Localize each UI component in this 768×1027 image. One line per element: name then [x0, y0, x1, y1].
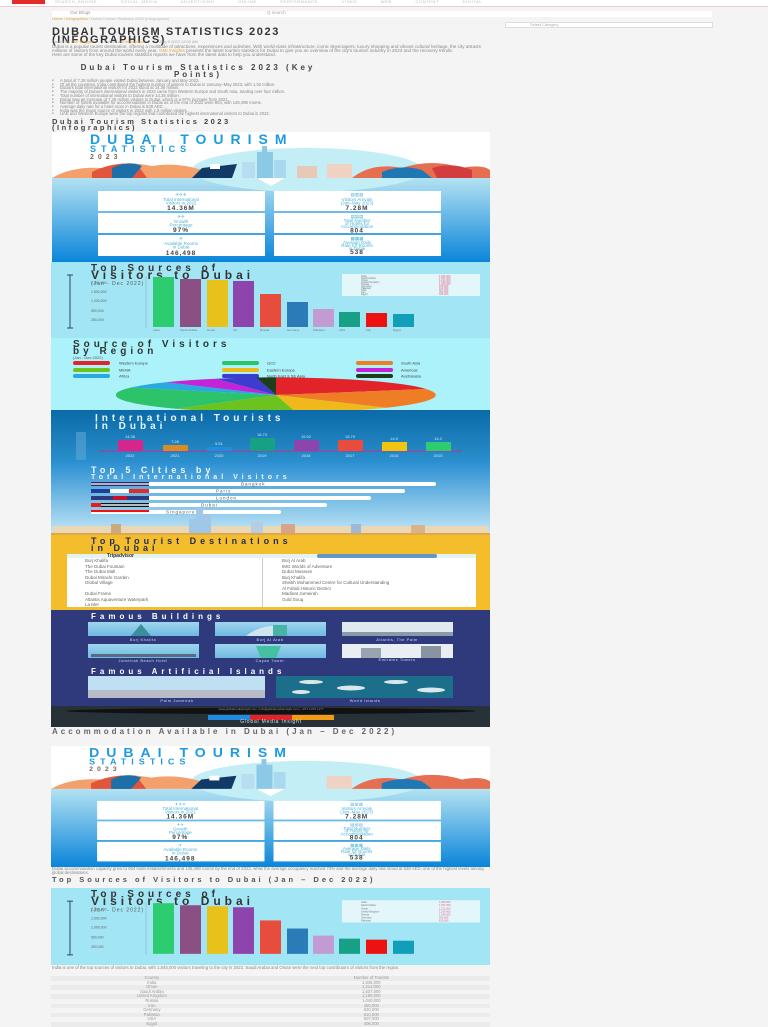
key points list: Total number of international visitors to Dubai were 14.36 million. — [60, 93, 180, 98]
chart: international tourists: 2021 — [171, 453, 180, 458]
chart: top sources of visitors: 1,845,000 — [439, 274, 451, 278]
visitors table: Saudi Arabia — [140, 989, 164, 994]
infographic repeat: hero + stat cards: Total International — [163, 806, 198, 811]
building tiles: Palm Jumeirah — [160, 698, 194, 703]
chart repeat: top sources of visitors: 1,637,000 — [439, 903, 451, 907]
visitors table: 1,637,000 — [362, 989, 381, 994]
chart: international tourists: 2018 — [302, 453, 311, 458]
chart: top sources of visitors: Saudi Arabia — [180, 328, 197, 332]
accommodation text: Dubai accommodation capacity grew to 804 hotel establishments and 146,498 rooms by the end of 2022, while the average occupancy reached 73% and the average daily rate stood at 538 AED, one of the highest levels among global destinations. — [52, 866, 484, 875]
intro paragraph: Dubai is a popular tourist destination, offering a multitude of attractions, experiences and activities. With world-class infrastructure, iconic skyscrapers, luxury shopping and vibrant cultural heritage, the city attracts millions of visitors from around the world every year. GMI Insights presents the latest tourism statistics for Dubai to give you an overview of the city's tourism industry in 2023 and the recovery trends. — [52, 44, 481, 53]
key points list: UAE and Western Europe were the top regions that contributed the highest international visitors to Dubai in 2022. — [60, 111, 270, 116]
footer: global media insight: www.globalmediainsight.com | info@globalmediainsight.com | +971 4 876 1177 — [218, 707, 324, 711]
visitors text: India is one of the top sources of visitors to Dubai, with 1,845,000 visitors traveling to the city in 2022. Saudi Arabia and Oman were the next top contributors of visitors from the region. — [52, 965, 400, 970]
infographic repeat: hero + stat cards: 538 — [350, 855, 364, 861]
infographic repeat: hero + stat cards: Growth — [173, 827, 188, 832]
top 5 cities: Total International Visitors — [91, 474, 291, 481]
key points list: Of all the countries, India contributed the highest number of visitors to Dubai in January–May 2023, with 1.02 million. — [60, 82, 275, 87]
destinations table: Sheikh Mohammed Centre for Cultural Understanding — [282, 580, 389, 585]
visitors table: Oman — [146, 984, 158, 989]
destinations table: Madinat Jumeirah — [282, 591, 318, 596]
infographic repeat: hero + stat cards: Accommodation — [341, 832, 373, 836]
visitors table: 620,000 — [364, 1007, 379, 1012]
chart repeat: top sources of visitors: Oman — [361, 906, 369, 910]
infographic 1: hero + stat cards: in Dubai — [349, 246, 365, 251]
destinations table: Burj Khalifa — [85, 558, 108, 563]
infographic 1: hero + stat cards: 538 — [350, 249, 364, 256]
infographic repeat: hero + stat cards: 97% — [172, 834, 188, 841]
key points list: Dubai saw an increase of 7.28 million visitors to Dubai, which is a 97% increase from 2021. — [60, 97, 229, 102]
pie: source of visitors by region: Australasia — [401, 374, 422, 378]
chart repeat: top sources of visitors: 1,000,000 — [91, 926, 107, 930]
chart repeat: top sources of visitors: 250,000 — [91, 945, 104, 949]
chart repeat: top sources of visitors: 1,212,000 — [439, 906, 451, 910]
top 5 cities: Top 5 Cities by — [91, 465, 214, 475]
infographic repeat: hero + stat cards: ✈ — [178, 843, 183, 847]
chart: top sources of visitors: 1,040,000 — [439, 282, 451, 286]
pie: source of visitors by region: North East & SE Asia — [267, 374, 306, 378]
infographic repeat: hero + stat cards: Percentage — [169, 830, 192, 835]
destinations table: Dubai Museum — [282, 569, 312, 574]
chart repeat: top sources of visitors: Visitors to Dubai — [91, 894, 254, 908]
infographic repeat: hero + stat cards: Visitors in 2022 — [165, 810, 196, 814]
chart: top sources of visitors: Top Sources of — [91, 263, 219, 274]
chart: top sources of visitors: 450,000 — [439, 290, 449, 294]
chart: international tourists: 15.92 — [301, 434, 312, 439]
pie: source of visitors by region: South Asia — [401, 360, 421, 366]
chart repeat: top sources of visitors: 610,000 — [439, 918, 449, 922]
infographic 1: hero + stat cards: ▦▦▦ — [351, 236, 364, 241]
chart: top sources of visitors — [51, 262, 490, 338]
infographic repeat: hero + stat cards: in Dubai — [348, 852, 365, 857]
chart: international tourists: 7.28 — [171, 439, 180, 444]
chart: top sources of visitors: Iran — [361, 290, 366, 294]
top 5 cities: London — [216, 496, 237, 500]
infographic 1: hero + stat cards: ✈✈✈ — [175, 192, 187, 197]
sidebar select — [505, 22, 713, 28]
infographic repeat: hero + stat cards: 146,498 — [165, 856, 196, 862]
destinations table: Dubai Frame — [85, 591, 111, 596]
chart: top sources of visitors: Russia — [260, 328, 270, 332]
infographic 1: hero + stat cards: 14.36M — [167, 205, 195, 212]
building tiles: Atlantis, The Palm — [376, 637, 418, 642]
key points list: A total of 7.28 million people visited Dubai between January and May 2023. — [60, 78, 199, 83]
chart: top sources of visitors: Russia — [361, 282, 369, 286]
infographic repeat: hero + stat cards: Visitors Arrivals — [341, 806, 373, 811]
destinations title — [91, 536, 292, 553]
visitors table: 450,000 — [364, 1003, 379, 1008]
visitors table: Russia — [145, 998, 158, 1003]
chart: top sources of visitors: Visitors to Dubai — [91, 268, 254, 282]
breadcrumb: Home / Infographics / Dubai Tourism Statistics 2023 (Infographics) — [52, 16, 169, 21]
chart: international tourists: 2020 — [215, 453, 224, 458]
destinations table: Tripadvisor — [107, 553, 134, 559]
building tiles: Burj Khalifa — [130, 637, 156, 642]
chart: top sources of visitors: 620,000 — [439, 284, 449, 288]
infographic repeat: hero + stat cards: STATISTICS — [89, 757, 190, 767]
chart: top sources of visitors: Germany — [287, 328, 300, 332]
key points list — [52, 78, 285, 116]
key points list: India was the major source of visitors in 2022 with 1.8 million visitors. — [60, 108, 188, 113]
pie: source of visitors by region: Americas — [401, 368, 418, 372]
chart: international tourists: International Tourists — [95, 413, 284, 424]
chart: top sources of visitors: (Jan - Dec 2022) — [91, 281, 144, 287]
visitors table: Country — [144, 975, 159, 980]
infographic 1: hero + stat cards: 97% — [173, 227, 189, 234]
chart: top sources of visitors: 250,000 — [91, 318, 104, 322]
intro paragraph — [52, 44, 481, 57]
chart: international tourists: 16.73 — [257, 432, 268, 437]
infographic 1: hero + stat cards: of Hotels for — [345, 221, 370, 226]
chart repeat: top sources of visitors: United Kingdom — [361, 909, 379, 913]
chart: international tourists: 2015 — [434, 453, 443, 458]
visitors table: 406,000 — [364, 1021, 379, 1026]
destinations table: Atlantis Aquaventure Waterpark — [85, 596, 148, 602]
logo — [208, 715, 334, 720]
infographic 1: hero + stat cards: Accommodation — [341, 224, 374, 229]
chart: top sources of visitors: 2,000,000 — [91, 281, 107, 285]
chart repeat: top sources of visitors: 500,000 — [91, 936, 104, 940]
chart: top sources of visitors: Saudi Arabia — [361, 276, 376, 280]
top sources heading: Top Sources of Visitors to Dubai (Jan – Dec 2022) — [52, 875, 375, 884]
key points list: Dubai's total international visitors for 2022 stood at 14.36 million. — [60, 85, 180, 90]
chart: international tourists: 14.2 — [434, 436, 443, 441]
visitors table — [51, 975, 490, 1027]
chart: top sources of visitors: Pakistan — [313, 328, 325, 332]
pie: source of visitors by region: MENA — [119, 368, 131, 372]
intro paragraph: Here are some of the key Dubai tourism statistics reports we have from the latest data to help you understand. — [52, 52, 276, 57]
infographic 1: hero + stat cards: Available Rooms — [164, 241, 199, 246]
infographic repeat: hero + stat cards: Total Number — [343, 826, 371, 831]
pie: source of visitors by region: Africa — [119, 374, 130, 378]
chart: top sources of visitors: India — [153, 328, 160, 332]
chart: top sources of visitors: USA — [339, 328, 345, 332]
key points list: Average daily rate for a hotel room in Dubai is 538 AED. — [60, 104, 164, 109]
chart: top sources of visitors: UK — [233, 328, 237, 332]
infographic repeat: hero + stat cards: (Jan–May 2023) — [340, 810, 374, 814]
chart: top sources of visitors: 500,000 — [91, 309, 104, 313]
visitors table: Iran — [148, 1003, 155, 1008]
top 5 cities: Paris — [216, 488, 231, 494]
chart: top sources of visitors: 1,180,000 — [439, 280, 451, 284]
infographic 1: hero + stat cards: in Dubai — [173, 244, 189, 250]
infographic 1: hero + stat cards — [52, 132, 490, 262]
destinations title: Top Tourist Destinations — [91, 536, 292, 546]
pie: source of visitors by region: Western Europe — [119, 360, 149, 366]
infographic repeat: hero + stat cards: of Hotels for — [345, 829, 369, 834]
infographic repeat: hero + stat cards: 7.28M — [345, 814, 368, 821]
key points list: Number of hotels available for accommodation in Dubai as of the end of 2022 were 804, with 146,498 rooms. — [60, 100, 262, 105]
pie: source of visitors by region — [51, 338, 490, 410]
infographic repeat: hero + stat cards: ▤▤▤ — [350, 822, 363, 827]
destinations title: in Dubai — [91, 543, 158, 553]
infographic 1: hero + stat cards: ▤▤▤ — [351, 214, 364, 219]
meta: Posted by GMI Blogger Posted in Infographics Aug 9 2023 12:00 AM — [52, 39, 198, 44]
building tiles: Cayan Tower — [256, 658, 285, 663]
visitors table: 1,040,000 — [362, 998, 381, 1003]
chart: top sources of visitors: Iran — [366, 328, 372, 332]
chart: international tourists: 15.79 — [345, 434, 356, 439]
infographic 1: hero + stat cards: Percentage — [169, 222, 193, 228]
building tiles: Famous Artificial Islands — [91, 667, 285, 676]
infographic 1: hero + stat cards: Rate for Rooms — [341, 243, 374, 248]
destinations table: Burj Al Arab — [282, 558, 306, 563]
chart: top sources of visitors: 610,000 — [439, 286, 449, 290]
key points heading: Dubai Tourism Statistics 2023 (Key Points) — [81, 63, 315, 78]
breadcrumb bar: Our Blogs — [70, 10, 90, 15]
visitors table: Germany — [143, 1007, 160, 1012]
footer: global media insight — [51, 706, 490, 727]
visitors table: 1,180,000 — [362, 993, 381, 998]
chart: top sources of visitors: United Kingdom — [361, 280, 379, 284]
infographic 1: hero + stat cards: Visitors Arrivals — [342, 197, 373, 202]
destinations table: Al Fahidi Historic District — [282, 586, 331, 590]
visitors table: USA — [148, 1016, 156, 1021]
destinations table: The Dubai Fountain — [85, 564, 125, 568]
infographic 1: hero + stat cards: Total International — [163, 197, 199, 202]
infographic 1: hero + stat cards: ✈ — [179, 236, 183, 241]
visitors table: Number of Tourists — [354, 975, 389, 980]
logo — [12, 0, 45, 4]
infographic 1: hero + stat cards: ▥▥▥ — [351, 192, 364, 197]
infographic 1: hero + stat cards: Average Daily — [343, 240, 372, 245]
infographic 1: hero + stat cards: Total Number — [344, 218, 371, 223]
chart repeat: top sources of visitors: 1,040,000 — [439, 912, 451, 916]
top 5 cities: Bangkok — [241, 482, 266, 486]
chart repeat: top sources of visitors: 620,000 — [439, 915, 449, 919]
visitors table: 1,845,000 — [362, 980, 381, 985]
chart repeat: top sources of visitors: Top Sources of — [91, 889, 219, 900]
chart repeat: top sources of visitors: 1,845,000 — [439, 900, 451, 904]
infographic 1: hero + stat cards: 7.28M — [345, 205, 369, 212]
chart: top sources of visitors: USA — [361, 288, 367, 292]
pie: source of visitors by region: Source of Visitors — [73, 339, 230, 350]
infographic repeat: hero + stat cards: ▥▥▥ — [350, 802, 363, 807]
pie: source of visitors by region: GCC — [267, 360, 276, 366]
infographic 1: hero + stat cards: Visitors in 2022 — [166, 200, 197, 206]
infographic repeat: hero + stat cards: DUBAI TOURISM — [89, 746, 293, 760]
chart repeat: top sources of visitors: 1,500,000 — [91, 916, 107, 920]
chart: top sources of visitors: 1,637,000 — [439, 276, 451, 280]
chart: top sources of visitors: 1,212,000 — [439, 278, 451, 282]
chart: top sources of visitors: Egypt — [393, 328, 401, 332]
visitors table: Pakistan — [144, 1012, 160, 1017]
chart: top sources of visitors: India — [361, 274, 367, 278]
nav bar — [0, 0, 768, 7]
chart: international tourists: 14.36 — [125, 434, 136, 439]
infographic 1: hero + stat cards: ✈✈ — [177, 214, 185, 219]
infographic repeat: hero + stat cards: ✈✈ — [177, 822, 184, 827]
chart: international tourists: in Dubai — [95, 421, 166, 432]
chart: international tourists: 2022 — [126, 453, 135, 458]
visitors table: Egypt — [146, 1021, 157, 1026]
infographics heading: Dubai Tourism Statistics 2023 (Infographics) — [52, 117, 231, 132]
sidebar select: Select Category — [530, 22, 558, 27]
infographic 1: hero + stat cards: STATISTICS — [90, 144, 191, 154]
chart: international tourists: 2017 — [346, 453, 355, 458]
destinations table: Dubai Miracle Garden — [85, 574, 129, 580]
footer: global media insight: Global Media Insight — [240, 719, 302, 725]
visitors table: 610,000 — [364, 1012, 379, 1017]
building tiles: Emirates Towers — [378, 657, 416, 662]
chart: top sources of visitors: 1,000,000 — [91, 299, 107, 303]
chart: top sources of visitors: Egypt — [361, 292, 368, 296]
visitors table: 1,212,000 — [362, 984, 381, 989]
chart: top sources of visitors: 406,000 — [439, 292, 449, 296]
infographic repeat: hero + stat cards: ▦▦▦ — [350, 843, 363, 847]
chart: top sources of visitors: Oman — [207, 328, 216, 332]
pie: source of visitors by region: by Region — [73, 346, 157, 357]
infographic 1: hero + stat cards: (Jan–May 2023) — [341, 200, 374, 206]
chart repeat: top sources of visitors: (Jan - Dec 2022) — [91, 907, 144, 913]
key points list: The majority of Dubai's international visitors in 2022 came from Western Europe and South Asia, totaling over four million. — [60, 89, 285, 94]
pie: source of visitors by region: Eastern Europe — [267, 368, 296, 372]
infographic repeat: hero + stat cards: in Dubai — [172, 851, 189, 855]
infographic 1: hero + stat cards: 146,498 — [166, 250, 196, 257]
accommodation heading: Accommodation Available in Dubai (Jan – Dec 2022) — [52, 727, 397, 736]
chart: international tourists — [51, 410, 490, 462]
chart: international tourists: 14.9 — [390, 436, 399, 441]
destinations table: Global Village — [85, 580, 113, 585]
infographic repeat: hero + stat cards: ✈✈✈ — [175, 802, 186, 807]
chart: top sources of visitors: Germany — [361, 284, 372, 288]
infographic repeat: hero + stat cards: Rate for Rooms — [341, 849, 373, 854]
chart: international tourists: 2016 — [390, 453, 399, 458]
building tiles: World Islands — [350, 698, 380, 703]
destinations table: La Mer — [85, 602, 99, 607]
infographic 1: hero + stat cards: Growth — [174, 219, 189, 224]
building tiles: Jumeirah Beach Hotel — [118, 658, 168, 663]
chart repeat: top sources of visitors: Germany — [361, 915, 372, 919]
chart repeat: top sources of visitors: Pakistan — [361, 918, 371, 922]
chart: international tourists: 5.51 — [215, 441, 224, 446]
infographic repeat: hero + stat cards: Average Daily — [343, 846, 372, 851]
chart: top sources of visitors: 1,500,000 — [91, 290, 107, 294]
building tiles: Burj Al Arab — [257, 637, 284, 642]
infographic repeat: hero + stat cards: 804 — [350, 835, 364, 841]
top 5 cities: Singapore — [166, 510, 196, 514]
pie: source of visitors by region: (Jan - Dec 2022) — [73, 355, 103, 360]
infographic 1: hero + stat cards: 2023 — [90, 154, 122, 161]
visitors table: 507,000 — [364, 1016, 379, 1021]
infographic repeat: hero + stat cards: 14.36M — [166, 814, 194, 821]
buildings title: Famous Buildings — [91, 612, 224, 621]
destinations table: The Dubai Mall — [85, 569, 115, 574]
destinations table: Burj Khalifa — [282, 574, 305, 580]
chart: top sources of visitors: 507,000 — [439, 288, 449, 292]
chart: top sources of visitors: Oman — [361, 278, 369, 282]
famous buildings & islands — [51, 610, 490, 706]
top 5 cities — [51, 462, 490, 535]
destinations table: IMG Worlds of Adventure — [282, 564, 332, 568]
chart repeat: top sources of visitors: 1,180,000 — [439, 909, 451, 913]
chart repeat: top sources of visitors: 2,000,000 — [91, 907, 107, 911]
visitors table: India — [147, 980, 156, 985]
destinations table — [67, 554, 476, 607]
visitors table: United Kingdom — [137, 993, 167, 998]
article title: DUBAI TOURISM STATISTICS 2023 (INFOGRAPHICS) — [52, 26, 280, 46]
breadcrumb bar — [52, 11, 712, 17]
destinations table: Gold Souq — [282, 596, 303, 602]
building tiles — [88, 622, 453, 703]
chart repeat: top sources of visitors: India — [361, 900, 367, 904]
infographic 1: hero + stat cards: 804 — [350, 228, 364, 234]
infographic repeat: hero + stat cards: Available Rooms — [163, 847, 198, 852]
chart: top sources of visitors: Pakistan — [361, 286, 372, 290]
chart repeat: top sources of visitors — [51, 888, 490, 965]
breadcrumb bar: Q search — [267, 10, 286, 15]
top tourist destinations — [51, 535, 490, 610]
chart repeat: top sources of visitors: Russia — [361, 912, 369, 916]
chart: international tourists: 2019 — [258, 453, 267, 458]
infographic repeat: hero + stat cards: 2023 — [89, 766, 121, 773]
infographic repeat: hero + stat cards — [51, 746, 490, 867]
chart repeat: top sources of visitors: Saudi Arabia — [361, 903, 376, 907]
top 5 cities: Dubai — [201, 502, 218, 508]
